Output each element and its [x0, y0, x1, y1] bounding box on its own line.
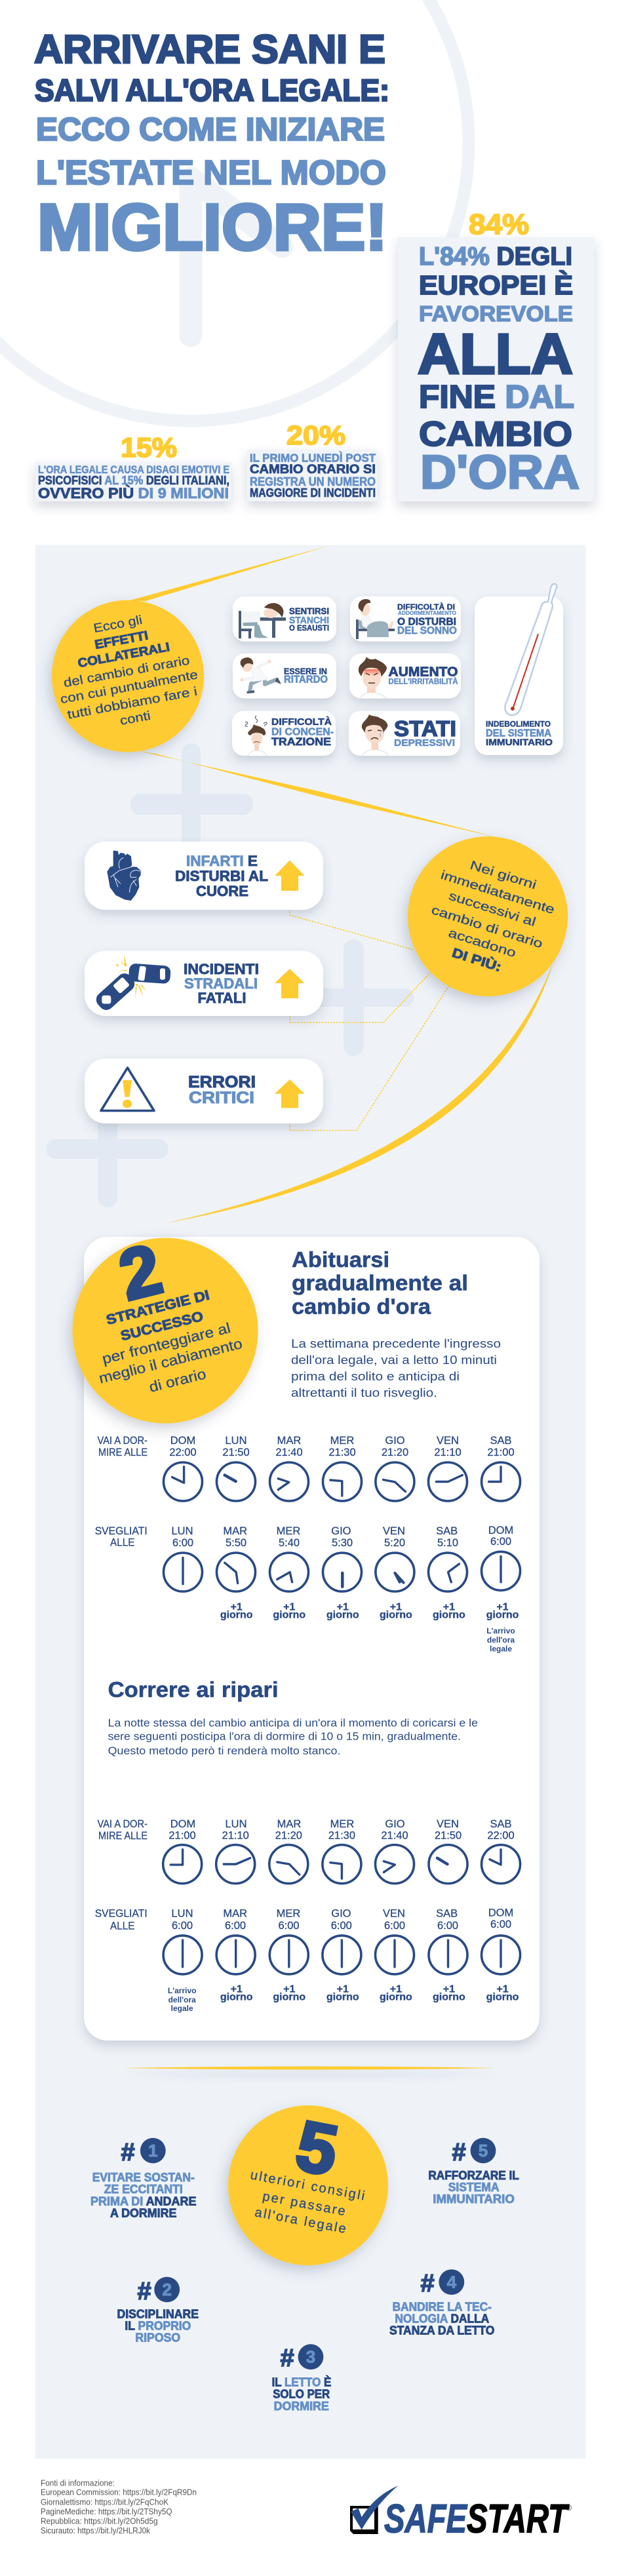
schedule 2: bedtime row: 21:30: [328, 1829, 355, 1841]
schedule 1: day notes: giorno: [326, 1609, 359, 1620]
number badge 4: 4: [447, 2273, 457, 2292]
tip 2: [117, 2277, 199, 2344]
schedule 1: bedtime row: 21:20: [382, 1447, 408, 1458]
callout circle: effetti collaterali: con cui puntualmente: [59, 668, 199, 707]
stat panel: 20%: [246, 420, 378, 501]
schedule 2: wake-up row: MER: [277, 1907, 300, 1919]
symptom card: indebolimento sistema immunitario: DEL SISTEMA: [486, 728, 551, 739]
schedule 1: day notes: +1: [283, 1602, 296, 1613]
callout circle: 5 consigli: ulteriori consigli: [249, 2168, 366, 2203]
effect card: incidenti: [85, 950, 323, 1016]
callout circle: 2 strategie di successo: meglio il cabiamento: [97, 1335, 244, 1386]
icon: angry face: [359, 657, 387, 699]
schedule 1: day notes: dell'ora: [487, 1635, 515, 1645]
schedule 2: bedtime row: LUN: [225, 1818, 247, 1830]
schedule 1: day notes: giorno: [273, 1609, 305, 1620]
schedule 1: bedtime row: VEN: [437, 1435, 459, 1447]
schedule 1: day notes: giorno: [380, 1609, 412, 1620]
schedule 1: wake-up row: 5:10: [437, 1537, 458, 1549]
ribbons linking the circles: [130, 545, 553, 1224]
effect card: infarti: DISTURBI AL: [175, 868, 268, 884]
stat panel: 20%: 20%: [286, 420, 345, 450]
number badge 2: #: [137, 2278, 151, 2305]
tip 1: ZE ECCITANTI: [104, 2183, 183, 2196]
icon: car crash: [93, 954, 171, 1013]
effect card: errori critici: [85, 1059, 323, 1123]
tip 4: STANZA DA LETTO: [389, 2324, 494, 2337]
symptom card: indebolimento sistema immunitario: [475, 584, 563, 755]
schedule 1: bedtime row: VAI A DOR-: [97, 1435, 148, 1447]
schedule 1: day notes: +1: [390, 1602, 402, 1613]
schedule 1: bedtime row: SAB: [490, 1435, 512, 1447]
logo wordmark: SAFESTART: [384, 2496, 570, 2541]
callout circle: 5 consigli: [228, 2105, 388, 2265]
schedule 2: wake-up row: 6:00: [331, 1920, 352, 1932]
symptom card: stati depressivi: DEPRESSIVI: [394, 737, 455, 749]
stat panel: 84%: 84%: [469, 208, 529, 241]
effect card: errori critici: CRITICI: [189, 1089, 254, 1107]
panel: strategie: [84, 1237, 540, 2040]
schedule 1: wake-up row: GIO: [331, 1525, 351, 1537]
callout circle: 2 strategie di successo: di orario: [148, 1365, 208, 1395]
schedule 1: bedtime row: MIRE ALLE: [98, 1447, 148, 1458]
symptom card: sentirsi stanchi: STANCHI: [289, 615, 329, 626]
callout circle: effetti collaterali: COLLATERALI: [77, 640, 171, 671]
schedule 2: bedtime row: VAI A DOR-: [97, 1818, 148, 1830]
arrow up: [275, 860, 304, 891]
callout circle: 5 consigli: per passare: [262, 2189, 347, 2219]
callout circle: 2 strategie di successo: [72, 1228, 258, 1424]
schedule 1: bedtime row: 21:00: [487, 1447, 515, 1458]
schedule 2: day notes: legale: [171, 2004, 193, 2013]
sources: Sicurauto: https://bit.ly/2HLRJ0k: [41, 2526, 151, 2535]
sources: European Commission: https://bit.ly/2FqR9Dn: [41, 2488, 197, 2497]
stat panel: 84%: EUROPEI È: [419, 270, 573, 300]
schedule 2: bedtime row: 21:40: [381, 1829, 408, 1841]
title: ECCO COME INIZIARE: [36, 112, 385, 147]
stat panel: 84%: FINE DAL: [419, 380, 574, 415]
number badge 3: #: [280, 2345, 294, 2372]
symptom card: difficolta di addormentamento: DEL SONNO: [397, 625, 457, 636]
schedule 1: wake-up row: DOM: [488, 1525, 513, 1536]
schedule 2: wake-up row: ALLE: [110, 1921, 135, 1932]
schedule 1: wake-up row: ALLE: [110, 1536, 135, 1548]
tip 3: DORMIRE: [274, 2400, 329, 2413]
dotted connectors: [290, 891, 449, 1130]
callout circle: 5 consigli: 5: [290, 2105, 344, 2191]
tip 4: NOLOGIA DALLA: [395, 2313, 489, 2326]
tip 4: BANDIRE LA TEC-: [393, 2301, 492, 2314]
schedule 2: wake-up row: VEN: [383, 1907, 405, 1919]
title: [34, 27, 389, 264]
symptom card: difficolta di concentrazione: DI CONCEN-: [271, 726, 334, 738]
symptom card: difficolta di addormentamento: ADDORMENTAMENTO: [398, 610, 456, 616]
schedule 2: day notes: giorno: [380, 1991, 412, 2002]
schedule 2: day notes: +1: [283, 1984, 296, 1995]
paragraph: abituarsi: La settimana precedente l'ingresso: [291, 1337, 501, 1350]
schedule 2: bedtime row: DOM: [170, 1818, 195, 1830]
schedule 1: day notes: +1: [337, 1602, 349, 1613]
symptom card: difficolta di addormentamento: O DISTURBI: [397, 616, 456, 628]
schedule 2: day notes: dell'ora: [168, 1995, 196, 2004]
schedule 1: wake-up row: 6:00: [172, 1537, 193, 1549]
effect card: incidenti: INCIDENTI: [184, 961, 259, 977]
callout circle: 5 consigli: all'ora legale: [254, 2205, 347, 2236]
symptom card: indebolimento sistema immunitario: IMMUNITARIO: [486, 737, 553, 747]
symptom card: difficolta di addormentamento: [350, 596, 461, 641]
number badge 1: 1: [148, 2141, 158, 2160]
symptom card: aumento irritabilita: DELL'IRRITABILITÀ: [388, 676, 458, 686]
schedule 2: bedtime row: VEN: [437, 1818, 459, 1830]
schedule 1: wake-up row: MAR: [223, 1525, 247, 1537]
heading: abituarsi: cambio d'ora: [292, 1294, 431, 1319]
stat panel: 84%: L'84% DEGLI: [419, 243, 572, 271]
symptom card: difficolta di addormentamento: DIFFICOLTÀ DI: [397, 602, 455, 612]
symptom card: difficolta di concentrazione: [232, 711, 336, 756]
number badge 5: #: [452, 2139, 466, 2166]
symptom card: essere in ritardo: RITARDO: [284, 674, 328, 686]
symptom card: aumento irritabilita: [349, 654, 461, 699]
sources: PagineMediche: https://bit.ly/2TShy5Q: [41, 2507, 172, 2516]
schedule 1: day notes: L'arrivo: [486, 1626, 515, 1635]
paragraph: abituarsi: [291, 1337, 501, 1399]
symptom card: essere in ritardo: [233, 654, 336, 699]
schedule 1: bedtime row: 21:40: [275, 1447, 303, 1458]
tip 5: IMMUNITARIO: [433, 2193, 515, 2206]
effect card: infarti: [85, 842, 323, 910]
tip 1: EVITARE SOSTAN-: [92, 2171, 195, 2184]
schedule 1: wake-up row: VEN: [383, 1525, 405, 1537]
number badge 5: [452, 2138, 496, 2166]
callout circle: effetti collaterali: conti: [119, 709, 151, 728]
heading: correre ai ripari: Correre ai ripari: [108, 1677, 279, 1702]
number badge 2: [137, 2277, 180, 2305]
callout circle: effetti collaterali: EFFETTI: [94, 629, 149, 652]
effect card: incidenti: STRADALI: [184, 975, 258, 992]
title: SALVI ALL'ORA LEGALE:: [35, 73, 389, 107]
schedule 1: bedtime row: 22:00: [169, 1447, 197, 1458]
schedule 2: wake-up row: 6:00: [437, 1920, 458, 1932]
symptom card: difficolta di concentrazione: TRAZIONE: [271, 735, 331, 748]
schedule 2: bedtime row: MIRE ALLE: [98, 1830, 148, 1842]
sources: Fonti di informazione:: [41, 2479, 115, 2488]
schedule 2: bedtime row: 21:00: [168, 1829, 196, 1841]
schedule 1: wake-up row: MER: [277, 1525, 300, 1537]
stat panel: 84%: CAMBIO: [419, 415, 572, 454]
effect card: incidenti: FATALI: [198, 990, 246, 1006]
paragraph: abituarsi: prima del solito e anticipa di: [291, 1370, 460, 1383]
tip 2: DISCIPLINARE: [117, 2307, 199, 2320]
callout circle: 2 strategie di successo: per fronteggiare al: [100, 1319, 232, 1367]
stat panel: 84%: ALLA: [418, 322, 573, 386]
schedule 2: day notes: L'arrivo: [168, 1986, 196, 1995]
logo: safestart: ®: [566, 2503, 572, 2512]
main background panel: [35, 545, 586, 2459]
schedule 2: day notes: +1: [337, 1984, 349, 1995]
number badge 1: [121, 2138, 166, 2166]
schedule 2: bedtime row: 21:20: [275, 1829, 302, 1841]
stat panel: 15%: OVVERO PIÙ DI 9 MILIONI: [38, 485, 229, 501]
callout circle: 2 strategie di successo: 2: [111, 1228, 169, 1315]
schedule 1: wake-up row: SVEGLIATI: [95, 1525, 148, 1537]
schedule 2: day notes: +1: [496, 1984, 509, 1995]
tip 1: A DORMIRE: [110, 2206, 176, 2219]
schedule 1: wake-up row: 5:30: [332, 1537, 353, 1549]
callout circle: nei giorni: accadono: [446, 926, 518, 960]
title: MIGLIORE!: [37, 191, 387, 264]
number badge 1: #: [121, 2139, 135, 2166]
arrow up: [275, 969, 304, 998]
logo: safestart: [350, 2486, 572, 2541]
stat panel: 20%: CAMBIO ORARIO SI: [250, 463, 376, 477]
tip 3: [272, 2344, 331, 2413]
icon: warning triangle: [101, 1068, 154, 1110]
schedule 2: bedtime row: 21:50: [435, 1829, 462, 1841]
tip 2: IL PROPRIO: [125, 2319, 191, 2332]
icon: person awake in bed: [356, 599, 395, 639]
schedule 2: wake-up row: DOM: [488, 1907, 513, 1919]
schedule 1: day notes: giorno: [486, 1609, 519, 1620]
title: ARRIVARE SANI E: [34, 27, 385, 71]
schedule 1: day notes: +1: [231, 1602, 243, 1613]
callout circle: nei giorni: [408, 836, 568, 996]
schedule 2: wake-up row: LUN: [171, 1907, 193, 1919]
divider lens: [122, 2066, 496, 2070]
background clock motif: [0, 0, 469, 421]
stat panel: 20%: MAGGIORE DI INCIDENTI: [250, 486, 376, 499]
stat panel: 20%: REGISTRA UN NUMERO: [250, 475, 376, 488]
stat panel: 15%: [35, 432, 231, 501]
tip 5: [428, 2138, 519, 2206]
schedule 2: bedtime row: 21:10: [222, 1829, 249, 1841]
stat panel: 20%: IL PRIMO LUNEDÌ POST: [250, 451, 376, 464]
heading: abituarsi: gradualmente al: [292, 1270, 468, 1295]
callout circle: 2 strategie di successo: STRATEGIE DI: [105, 1287, 211, 1328]
symptom card: sentirsi stanchi: SENTIRSI: [289, 606, 329, 616]
schedule 1: wake-up row: SAB: [436, 1525, 458, 1537]
schedule 1: day notes: giorno: [433, 1609, 465, 1620]
schedule 1: bedtime row: 21:50: [222, 1447, 250, 1458]
symptom card: sentirsi stanchi: O ESAUSTI: [289, 623, 329, 633]
schedule 2: day notes: +1: [231, 1984, 243, 1995]
symptom card: indebolimento sistema immunitario: INDEBOLIMENTO: [486, 720, 551, 729]
schedule 2: bedtime row: 22:00: [487, 1829, 515, 1841]
paragraph: correre ai ripari: La notte stessa del cambio anticipa di un'ora il momento di coricarsi e le: [108, 1717, 478, 1729]
symptom card: essere in ritardo: ESSERE IN: [284, 666, 327, 676]
icon: sad face: [362, 714, 389, 756]
paragraph: abituarsi: altrettanti il tuo risveglio.: [291, 1386, 437, 1399]
symptom card: sentirsi stanchi: [233, 596, 336, 641]
schedule 2: day notes: giorno: [433, 1991, 465, 2002]
tip 4: [389, 2269, 494, 2337]
schedule 1: wake-up row: 5:50: [226, 1537, 246, 1549]
schedule 2: wake-up row: MAR: [223, 1907, 247, 1919]
schedule 2: day notes: +1: [443, 1984, 455, 1995]
schedule 1: bedtime row: [97, 1435, 521, 1501]
symptom card: stati depressivi: STATI: [394, 716, 456, 741]
number badge 3: 3: [306, 2347, 315, 2367]
effect card: errori critici: ERRORI: [188, 1073, 256, 1091]
schedule 1: wake-up row: 5:40: [279, 1537, 300, 1549]
callout circle: effetti collaterali: del cambio di orario: [62, 654, 191, 690]
tip 5: RAFFORZARE IL: [428, 2169, 519, 2182]
schedule 2: wake-up row: 6:00: [225, 1920, 246, 1932]
callout circle: effetti collaterali: [52, 600, 204, 752]
schedule 2: day notes: giorno: [273, 1991, 305, 2002]
schedule 1: bedtime row: MER: [330, 1435, 354, 1447]
paragraph: correre ai ripari: Questo metodo però ti renderà molto stanco.: [108, 1745, 340, 1757]
schedule 2: bedtime row: SAB: [490, 1818, 512, 1830]
schedule 2: day notes: +1: [390, 1984, 402, 1995]
schedule 2: day notes: giorno: [326, 1991, 359, 2002]
schedule 2: wake-up row: [95, 1907, 520, 1974]
icon: thermometer: [505, 584, 557, 715]
tip 1: [90, 2138, 197, 2219]
schedule 2: bedtime row: [97, 1818, 521, 1884]
schedule 1: wake-up row: LUN: [171, 1525, 193, 1537]
paragraph: correre ai ripari: sere seguenti posticipa l'ora di dormire di 10 o 15 min, gradualmente.: [108, 1731, 461, 1743]
schedule 1: day notes: giorno: [220, 1609, 253, 1620]
stat panel: 84%: FAVOREVOLE: [419, 302, 573, 326]
callout circle: nei giorni: Nei giorni: [468, 859, 538, 892]
schedule 2: bedtime row: GIO: [385, 1818, 405, 1830]
stat panel: 84%: D'ORA: [420, 446, 580, 499]
callout circle: 2 strategie di successo: SUCCESSO: [119, 1309, 205, 1344]
callout circle: nei giorni: cambio di orario: [429, 903, 544, 951]
schedule 2: day notes: giorno: [220, 1991, 253, 2002]
number badge 4: [420, 2269, 464, 2297]
sources: Giornalettismo: https://bit.ly/2FqChoK: [41, 2497, 169, 2507]
schedule 2: wake-up row: SAB: [436, 1907, 458, 1919]
icon: tired person at desk: [239, 603, 286, 638]
tip 5: SISTEMA: [448, 2181, 500, 2194]
schedule 1: day notes: +1: [443, 1602, 455, 1613]
icon: confused person: [245, 716, 267, 756]
sources: Repubblica: https://bit.ly/2Oh5d5g: [41, 2516, 158, 2526]
callout circle: nei giorni: successivi al: [447, 889, 538, 929]
symptom card: stati depressivi: [349, 711, 460, 756]
schedule 2: bedtime row: MAR: [277, 1818, 301, 1830]
schedule 1: wake-up row: 5:20: [384, 1537, 405, 1549]
number badge 4: #: [420, 2270, 435, 2297]
icon: running person: [240, 657, 281, 693]
sources: [41, 2479, 197, 2535]
tip 3: IL LETTO È: [272, 2375, 331, 2389]
paragraph: correre ai ripari: [108, 1717, 478, 1757]
symptom card: aumento irritabilita: AUMENTO: [388, 665, 458, 679]
stat panel: 84%: [398, 208, 595, 501]
schedule 2: wake-up row: SVEGLIATI: [95, 1907, 148, 1919]
number badge 2: 2: [162, 2280, 172, 2299]
stat panel: 15%: 15%: [121, 432, 177, 463]
schedule 2: bedtime row: MER: [330, 1818, 354, 1830]
schedule 1: bedtime row: MAR: [277, 1435, 301, 1447]
number badge 3: [280, 2344, 323, 2372]
schedule 2: wake-up row: 6:00: [490, 1919, 511, 1930]
schedule 2: wake-up row: 6:00: [278, 1920, 300, 1932]
schedule 1: wake-up row: 6:00: [490, 1536, 511, 1548]
background crosses: [46, 743, 414, 1207]
schedule 2: wake-up row: 6:00: [172, 1920, 193, 1932]
paragraph: abituarsi: dell'ora legale, vai a letto 10 minuti: [291, 1354, 497, 1367]
heading: abituarsi: Abituarsi: [292, 1247, 389, 1272]
schedule 1: bedtime row: DOM: [170, 1435, 195, 1447]
logo checkbox: [350, 2486, 398, 2534]
callout circle: effetti collaterali: tutti dobbiamo fare i: [66, 685, 199, 722]
schedule 2: day notes: giorno: [486, 1991, 519, 2002]
tip 2: RIPOSO: [135, 2331, 180, 2344]
heading: abituarsi: [292, 1247, 468, 1319]
symptom card: difficolta di concentrazione: DIFFICOLTÀ: [271, 716, 332, 728]
callout circle: nei giorni: immediatamente: [439, 868, 556, 917]
schedule 1: bedtime row: GIO: [385, 1435, 405, 1447]
callout circle: effetti collaterali: Ecco gli: [92, 614, 144, 636]
schedule 2: day notes: [168, 1984, 519, 2013]
stat panel: 15%: PSICOFISICI AL 15% DEGLI ITALIANI,: [38, 474, 229, 487]
effect card: infarti: INFARTI E: [186, 853, 258, 869]
number badge 5: 5: [479, 2141, 488, 2160]
effect card: infarti: CUORE: [196, 883, 248, 899]
schedule 1: bedtime row: 21:10: [434, 1447, 462, 1458]
schedule 1: wake-up row: [95, 1525, 520, 1591]
schedule 1: bedtime row: LUN: [225, 1435, 247, 1447]
schedule 1: bedtime row: 21:30: [328, 1447, 356, 1458]
schedule 1: day notes: [220, 1602, 519, 1654]
arrow up: [275, 1080, 304, 1108]
schedule 2: wake-up row: GIO: [331, 1907, 351, 1919]
schedule 2: wake-up row: 6:00: [384, 1920, 405, 1932]
tip 3: SOLO PER: [273, 2388, 330, 2401]
icon: anatomical heart: [108, 851, 140, 900]
schedule 1: day notes: +1: [496, 1602, 509, 1613]
tip 1: PRIMA DI ANDARE: [90, 2195, 197, 2208]
title: L'ESTATE NEL MODO: [36, 154, 386, 192]
stat panel: 15%: L'ORA LEGALE CAUSA DISAGI EMOTIVI E: [38, 464, 229, 476]
callout circle: nei giorni: DI PIÙ:: [450, 945, 503, 975]
schedule 1: day notes: legale: [490, 1645, 512, 1654]
